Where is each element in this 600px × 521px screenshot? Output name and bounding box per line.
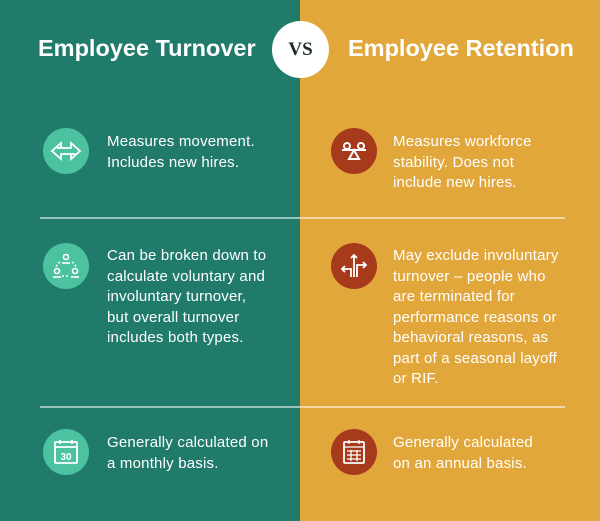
panel: retention background: [300, 0, 600, 521]
text: turnover row 2: involuntary turnover,: [107, 288, 246, 305]
heading: Employee Turnover: Employee Turnover: [38, 35, 256, 61]
text: retention row 2: are terminated for: [393, 288, 515, 305]
text: retention row 1: stability. Does not: [393, 154, 514, 170]
text: turnover row 2: [107, 247, 266, 346]
icon: diverging arrows: [331, 243, 377, 289]
heading: Employee Retention: Employee Retention: [348, 35, 574, 61]
text: retention row 2: May exclude involuntary: [393, 247, 559, 264]
text: retention row 2: [393, 247, 559, 387]
text: retention row 1: [393, 133, 532, 191]
text: retention row 1: Measures workforce: [393, 133, 532, 150]
text: turnover row 1: [107, 133, 255, 170]
icon: arrows: [43, 128, 89, 174]
icon: network: [43, 243, 89, 289]
text: retention row 3: [393, 434, 533, 472]
vs badge: VS: [288, 39, 313, 60]
vs badge: [272, 21, 329, 78]
text: turnover row 2: Can be broken down to: [107, 247, 266, 264]
icon: calendar 30: [43, 429, 89, 475]
text: turnover row 3: [107, 434, 268, 472]
text: turnover row 3: Generally calculated on: [107, 434, 268, 451]
text: turnover row 1: Includes new hires.: [107, 154, 239, 170]
icon: balance: [331, 128, 377, 174]
text: turnover row 2: but overall turnover: [107, 308, 239, 326]
text: turnover row 3: a monthly basis.: [107, 454, 219, 472]
panel: turnover background: [0, 0, 300, 521]
text: turnover row 2: calculate voluntary and: [107, 268, 265, 284]
text: retention row 3: Generally calculated: [393, 434, 533, 451]
text: retention row 3: on an annual basis.: [393, 454, 527, 472]
text: retention row 2: performance reasons or: [393, 308, 557, 326]
text: retention row 2: behavioral reasons, as: [393, 329, 548, 346]
icon: calendar 30: 30: [60, 452, 72, 463]
text: turnover row 1: Measures movement.: [107, 133, 255, 150]
text: retention row 1: include new hires.: [393, 174, 517, 191]
text: retention row 2: part of a seasonal layoff: [393, 350, 557, 366]
text: turnover row 2: includes both types.: [107, 329, 244, 346]
text: retention row 2: or RIF.: [393, 370, 439, 387]
text: retention row 2: turnover – people who: [393, 268, 546, 284]
icon: calendar grid: [331, 429, 377, 475]
